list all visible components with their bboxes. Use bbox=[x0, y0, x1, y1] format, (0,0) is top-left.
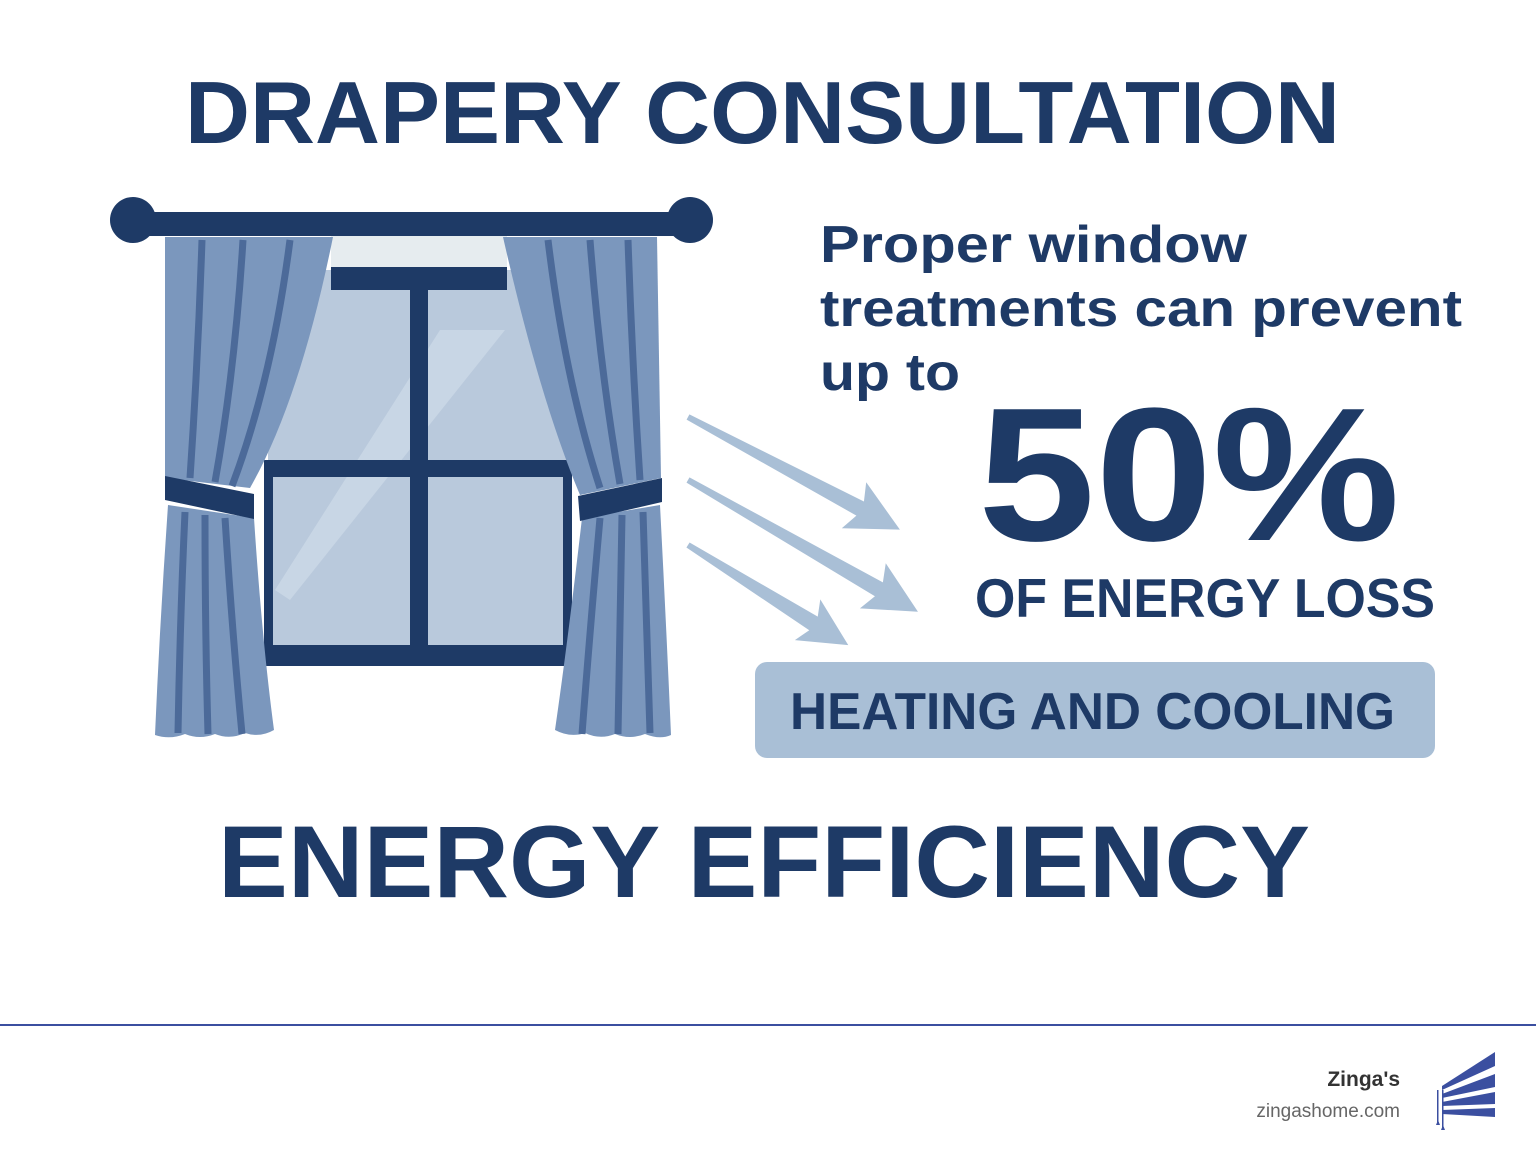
statement text: treatments can prevent bbox=[820, 280, 1462, 338]
statement text: Proper window bbox=[820, 216, 1248, 274]
window frame bbox=[264, 267, 572, 666]
arrow 2 bbox=[675, 457, 931, 634]
icon: blinds logo bbox=[1436, 1052, 1495, 1130]
title: DRAPERY CONSULTATION bbox=[185, 63, 1340, 162]
illustration: window with curtains bbox=[110, 197, 713, 737]
window light strip bbox=[331, 236, 507, 268]
arrow 1 bbox=[676, 394, 912, 553]
pill: heating and cooling bbox=[755, 662, 1435, 758]
glass glare bbox=[275, 330, 505, 600]
right curtain bbox=[503, 237, 671, 737]
statement text: up to bbox=[820, 344, 960, 402]
window glass bbox=[268, 270, 568, 660]
arrows bbox=[675, 394, 931, 666]
footer brand: Zinga's bbox=[1327, 1068, 1400, 1091]
curtain rod bbox=[140, 212, 685, 236]
big stat 50%: 50% bbox=[978, 369, 1400, 581]
footer brand bbox=[1256, 1068, 1400, 1122]
subtitle: ENERGY EFFICIENCY bbox=[218, 805, 1310, 919]
stat label: OF ENERGY LOSS bbox=[975, 567, 1435, 629]
left curtain bbox=[155, 237, 333, 737]
footer brand: zingashome.com bbox=[1256, 1101, 1400, 1122]
statement text bbox=[820, 216, 1462, 402]
tiebacks bbox=[165, 476, 254, 519]
arrow 3 bbox=[675, 525, 861, 666]
pill: heating and cooling: HEATING AND COOLING bbox=[790, 683, 1395, 741]
